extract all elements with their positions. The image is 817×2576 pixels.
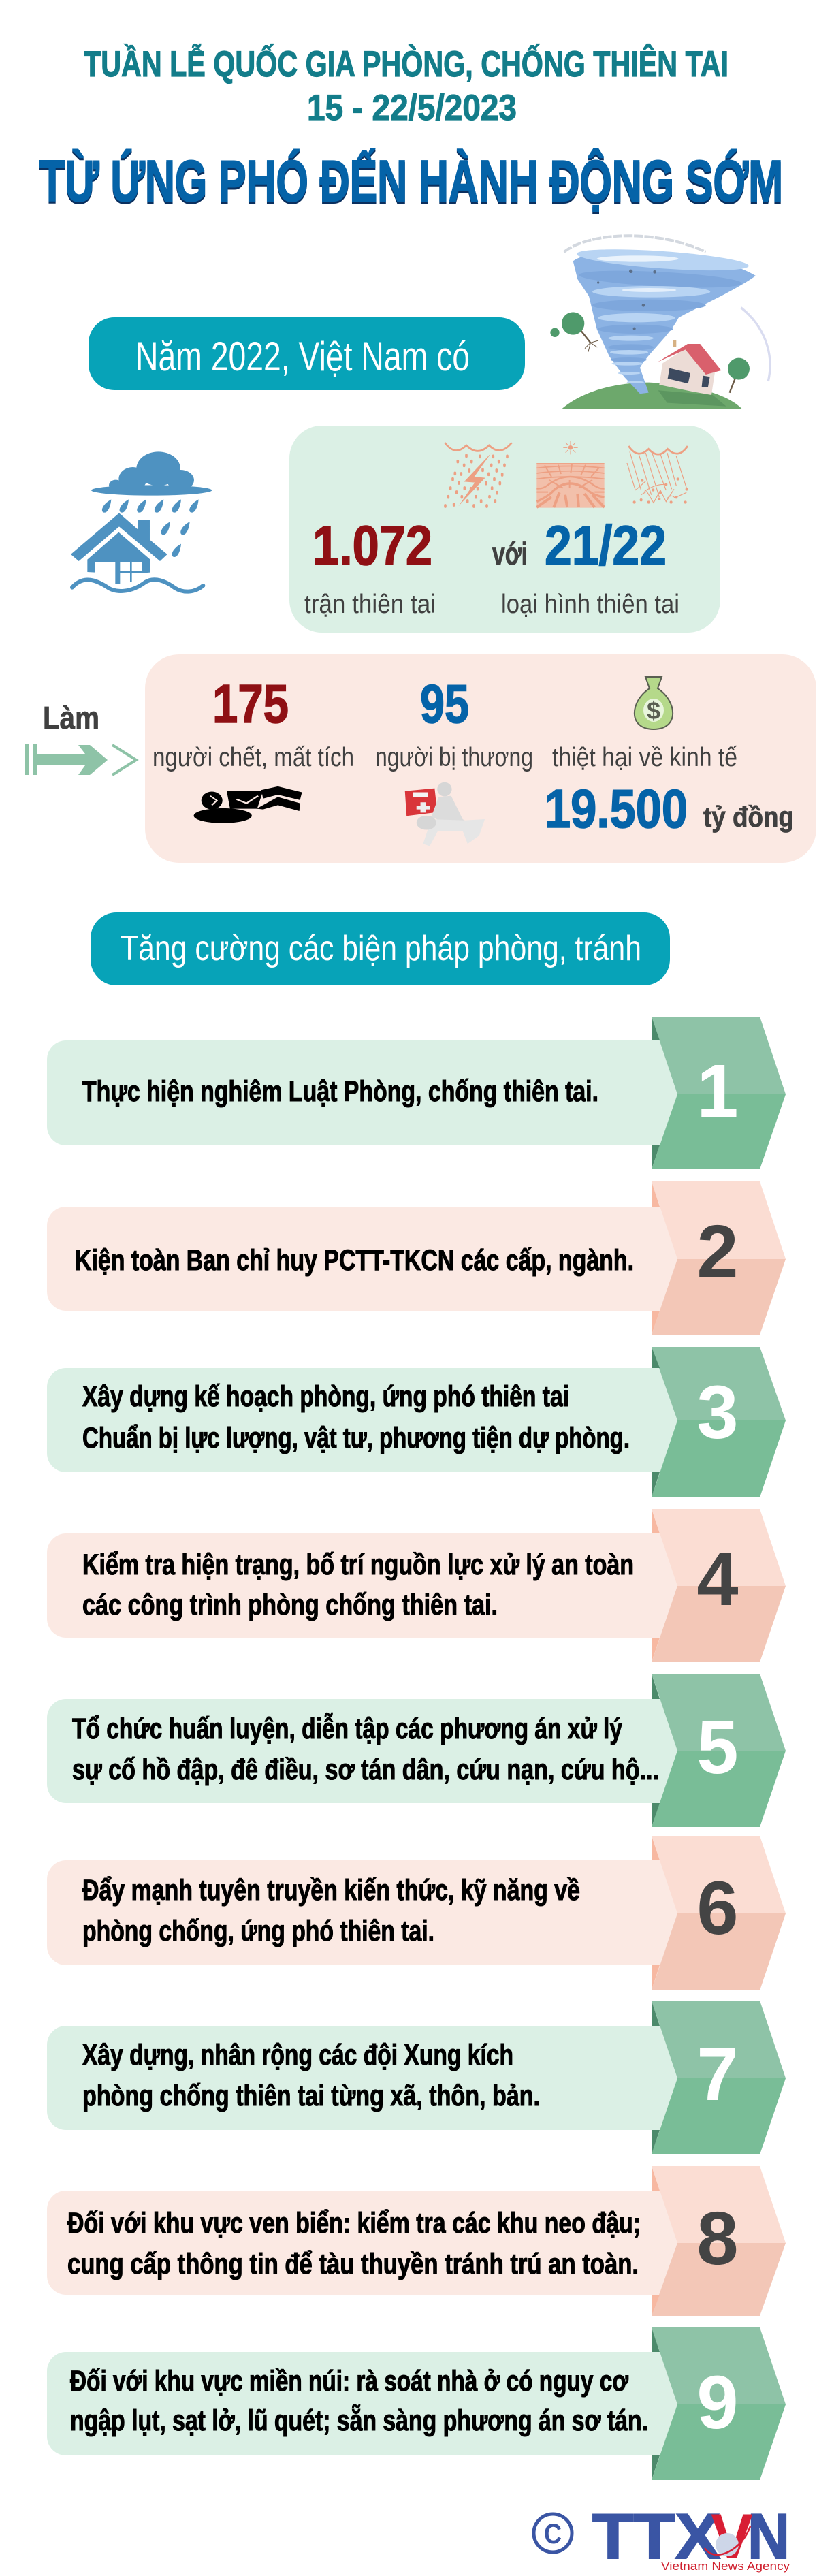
measure 8: Đối với khu vực ven biển: kiểm tra các khu neo đậu; <box>67 2207 641 2240</box>
measure 7 <box>47 2001 786 2154</box>
connector word: với <box>492 536 528 571</box>
measure 6: Đẩy mạnh tuyên truyền kiến thức, kỹ năng về <box>82 1874 580 1907</box>
measure 7: 7 <box>696 2033 739 2116</box>
measure 2 <box>47 1181 786 1335</box>
icon: flooded house under rain cloud <box>71 451 212 592</box>
icon: body on ground <box>194 786 302 823</box>
arrow <box>25 744 136 775</box>
measure 7: Xây dựng, nhân rộng các đội Xung kích <box>82 2039 513 2071</box>
label: caused: Làm <box>43 700 99 735</box>
section pill: measures <box>91 912 670 985</box>
icon: money bag: $ <box>647 697 660 725</box>
measure 3: Chuẩn bị lực lượng, vật tư, phương tiện dự phòng. <box>82 1422 630 1454</box>
icon: money bag <box>635 677 673 729</box>
stat: dead and missing: 175 <box>212 673 289 734</box>
measure 9 <box>47 2327 786 2480</box>
label: types: loại hình thiên tai <box>501 590 679 619</box>
section pill: year 2022: Năm 2022, Việt Nam có <box>135 334 470 379</box>
measure 3: Xây dựng kế hoạch phòng, ứng phó thiên tai <box>82 1380 569 1413</box>
icon: tornado hitting house <box>550 236 770 409</box>
measure 8: 8 <box>696 2197 739 2280</box>
measure 1 <box>47 1017 786 1169</box>
measure 5: sự cố hồ đập, đê điều, sơ tán dân, cứu nạn, cứu hộ... <box>72 1753 659 1786</box>
measure 8: cung cấp thông tin để tàu thuyền tránh trú an toàn. <box>67 2248 639 2280</box>
measure 3: 3 <box>696 1371 739 1454</box>
section pill: year 2022 <box>89 317 525 390</box>
measure 1: Thực hiện nghiêm Luật Phòng, chống thiên tai. <box>82 1075 598 1108</box>
logo: copyright and TTXVN <box>534 2500 790 2573</box>
logo: copyright and TTXVN: C <box>544 2517 562 2549</box>
stat: injured: 95 <box>420 673 469 734</box>
logo: copyright and TTXVN: N <box>748 2500 790 2572</box>
measure 5 <box>47 1674 786 1827</box>
icon: storm and lightning <box>445 443 512 507</box>
stat: economic loss: 19.500 <box>545 778 688 839</box>
measure 9: ngập lụt, sạt lở, lũ quét; sẵn sàng phương án sơ tán. <box>70 2404 648 2437</box>
logo: copyright and TTXVN: TTX <box>592 2500 720 2572</box>
measure 6: 6 <box>696 1866 739 1950</box>
measure 5: 5 <box>696 1706 739 1790</box>
measure 6: phòng chống, ứng phó thiên tai. <box>82 1915 434 1947</box>
label: disasters: trận thiên tai <box>304 590 436 619</box>
stat: disasters count: 1.072 <box>313 515 432 577</box>
label: economic damage: thiệt hại về kinh tế <box>552 743 737 772</box>
measure 5: Tổ chức huấn luyện, diễn tập các phương án xử lý <box>72 1712 622 1745</box>
icon: drought cracked earth <box>536 441 605 508</box>
measure 4: 4 <box>696 1538 739 1621</box>
measure 3 <box>47 1347 786 1497</box>
measure 4: các công trình phòng chống thiên tai. <box>82 1589 498 1621</box>
icon: first aid <box>405 782 485 846</box>
panel: number of disasters <box>289 426 720 633</box>
measure 6 <box>47 1836 786 1990</box>
icon: landslide rain <box>627 446 688 503</box>
measure 4 <box>47 1509 786 1662</box>
date line: 15 - 22/5/2023 <box>307 88 517 128</box>
measure 9: 9 <box>696 2361 739 2445</box>
label: injured: người bị thương <box>375 743 533 772</box>
panel: human and economic losses <box>145 654 816 863</box>
section pill: measures: Tăng cường các biện pháp phòng, tránh <box>121 929 641 968</box>
logo: copyright and TTXVN: Vietnam News Agency <box>661 2560 790 2573</box>
measure 7: phòng chống thiên tai từng xã, thôn, bản. <box>82 2080 540 2112</box>
unit: tỷ đồng <box>703 801 794 833</box>
measure 1: 1 <box>696 1049 739 1133</box>
label: dead and missing: người chết, mất tích <box>153 743 354 772</box>
measure 8 <box>47 2166 786 2316</box>
logo: copyright and TTXVN: V <box>711 2500 753 2572</box>
measure 2: Kiện toàn Ban chỉ huy PCTT-TKCN các cấp, ngành. <box>75 1244 634 1277</box>
stat: disaster types: 21/22 <box>545 515 667 577</box>
measure 4: Kiểm tra hiện trạng, bố trí nguồn lực xử lý an toàn <box>82 1548 634 1581</box>
measure 9: Đối với khu vực miền núi: rà soát nhà ở có nguy cơ <box>70 2365 628 2398</box>
measure 2: 2 <box>696 1210 739 1294</box>
